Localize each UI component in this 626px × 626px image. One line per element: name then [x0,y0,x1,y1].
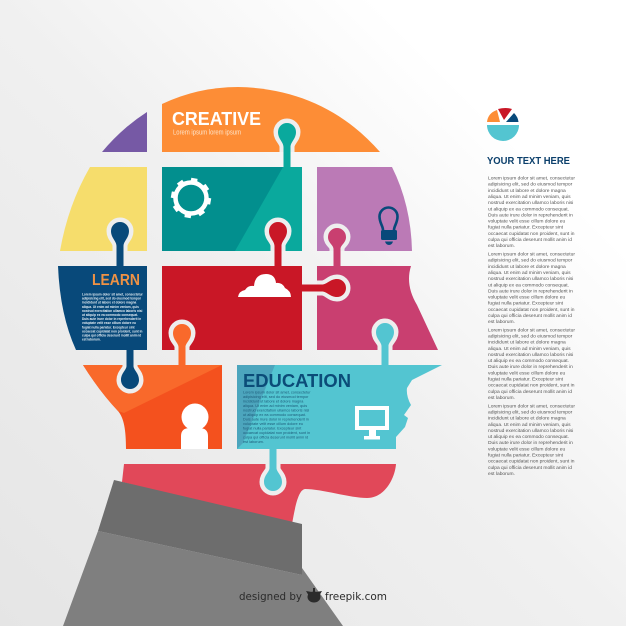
suit body [63,464,396,626]
paragraph 1: nostrud exercitation ullamco laboris nisi [488,200,573,206]
piece: purple corner [102,112,147,152]
paragraph 3: occaecat cupidatat non proident, sunt in [488,383,575,389]
paragraph 2: nostrud exercitation ullamco laboris nisi [488,276,573,282]
paragraph 1: aliqua. Ut enim ad minim veniam, quis [488,194,571,200]
text block: learn: nostrud exercitation ullamco laboris nisi [82,309,143,313]
icon: cloud [238,274,291,297]
paragraph 1: adipisicing elit, sed do eiusmod tempor [488,182,573,188]
paragraph 2: est laborum. [488,319,515,325]
connector: red pin right [302,278,346,298]
piece: creative orange [162,87,380,152]
piece: plum bulb [317,167,412,251]
paragraph 2: aliqua. Ut enim ad minim veniam, quis [488,270,571,276]
heading: learn: LEARN [92,272,140,289]
text block: learn: aliqua. Ut enim ad minim veniam, quis [82,305,139,309]
paragraph 4: fugiat nulla pariatur. Excepteur sint [488,452,564,458]
connector: navy pin top [110,222,130,266]
text block: education: est laborum. [243,440,264,444]
icon: gear [171,178,211,218]
neck and chin piece [122,464,396,524]
icon: person [181,404,208,449]
text block: learn: Lorem ipsum dolor sit amet, consectetur [82,292,144,296]
paragraph 1: ut aliquip ex ea commodo consequat. [488,206,569,212]
piece: education cyan [237,365,442,449]
suit jacket [63,531,343,626]
connector: navy pin bottom [120,350,140,390]
text block: education: adipisicing elit, sed do eiusmod tempor [243,395,309,399]
suit collar [98,480,302,575]
icon: monitor [355,406,389,440]
credit: designed by freepik [239,588,387,603]
heading: your text here: YOUR TEXT HERE [487,155,570,167]
paragraph 1: culpa qui officia deserunt mollit anim id [488,237,572,243]
text block: education: Lorem ipsum dolor sit amet, consectetur [243,390,311,394]
paragraph 1: est laborum. [488,243,515,249]
text block: learn: Duis aute irure dolor in reprehenderit in [82,317,141,321]
paragraph 1: incididunt ut labore et dolore magna [488,188,566,194]
connector: cyan pin top [376,322,394,365]
text block: learn: ut aliquip ex ea commodo consequat. [82,313,138,317]
paragraph 2: occaecat cupidatat non proident, sunt in [488,307,575,313]
piece: teal gear [162,167,302,251]
text block: education: ut aliquip ex ea commodo consequat. [243,413,306,417]
paragraph 2: Duis aute irure dolor in reprehenderit in [488,288,573,294]
icon: light bulb [380,208,398,245]
connector: teal pin [278,122,296,167]
paragraph 1: occaecat cupidatat non proident, sunt in [488,231,575,237]
paragraph 2: ut aliquip ex ea commodo consequat. [488,282,569,288]
heading: education: EDUCATION [243,370,351,391]
paragraph 3: incididunt ut labore et dolore magna [488,340,566,346]
heading: creative: CREATIVE [172,109,261,129]
text block: education: incididunt ut labore et dolore magna [243,400,304,404]
piece: yellow [60,167,147,251]
connector: orange pin [172,324,192,365]
text block: learn: voluptate velit esse cillum dolore eu [82,321,136,325]
paragraph 3: adipisicing elit, sed do eiusmod tempor [488,333,573,339]
text block: education: aliqua. Ut enim ad minim veniam, quis [243,404,307,408]
paragraph 4: nostrud exercitation ullamco laboris nisi [488,428,573,434]
text block: learn: culpa qui officia deserunt mollit anim id [82,334,141,338]
icon: pie chart [487,108,519,141]
text block: education: voluptate velit esse cillum dolore eu [243,422,303,426]
text block: learn: incididunt ut labore et dolore magna [82,301,137,305]
paragraph 4: Lorem ipsum dolor sit amet, consectetur [488,403,575,409]
paragraph 3: voluptate velit esse cillum dolore eu [488,370,565,376]
paragraph 4: aliqua. Ut enim ad minim veniam, quis [488,422,571,428]
paragraph 3: aliqua. Ut enim ad minim veniam, quis [488,346,571,352]
text block: learn: occaecat cupidatat non proident, sunt in [82,329,142,333]
piece: learn navy [58,266,147,350]
paragraph 4: adipisicing elit, sed do eiusmod tempor [488,409,573,415]
piece: pink [317,266,438,350]
text block: learn: fugiat nulla pariatur. Excepteur sint [82,325,135,329]
paragraph 4: est laborum. [488,471,515,477]
subheading: creative: Lorem ipsum lorem ipsum [173,130,241,136]
paragraph 3: fugiat nulla pariatur. Excepteur sint [488,376,564,382]
paragraph 2: incididunt ut labore et dolore magna [488,264,566,270]
paragraph 1: Duis aute irure dolor in reprehenderit in [488,212,573,218]
paragraph 1: Lorem ipsum dolor sit amet, consectetur [488,176,575,182]
paragraph 1: voluptate velit esse cillum dolore eu [488,219,565,225]
paragraph 3: est laborum. [488,395,515,401]
paragraph 4: ut aliquip ex ea commodo consequat. [488,434,569,440]
connector: pink pin top [328,228,346,266]
paragraph 2: Lorem ipsum dolor sit amet, consectetur [488,252,575,258]
paragraph 4: incididunt ut labore et dolore magna [488,416,566,422]
paragraph 4: culpa qui officia deserunt mollit anim id [488,465,572,471]
piece: red cloud [162,266,302,350]
paragraph 2: fugiat nulla pariatur. Excepteur sint [488,301,564,307]
paragraph 2: voluptate velit esse cillum dolore eu [488,295,565,301]
text block: learn: adipisicing elit, sed do eiusmod tempor [82,297,142,301]
text block: education: culpa qui officia deserunt mollit anim id [243,436,308,440]
paragraph 2: culpa qui officia deserunt mollit anim id [488,313,572,319]
text block: education: fugiat nulla pariatur. Excepteur sint [243,426,302,430]
paragraph 3: ut aliquip ex ea commodo consequat. [488,358,569,364]
paragraph 3: nostrud exercitation ullamco laboris nisi [488,352,573,358]
paragraph 2: adipisicing elit, sed do eiusmod tempor [488,258,573,264]
paragraph 3: culpa qui officia deserunt mollit anim id [488,389,572,395]
text column [488,176,576,477]
paragraph 3: Duis aute irure dolor in reprehenderit in [488,364,573,370]
paragraph 1: fugiat nulla pariatur. Excepteur sint [488,225,564,231]
text block: education: nostrud exercitation ullamco laboris nisi [243,408,309,412]
connector: red pin top [268,222,288,266]
paragraph 4: occaecat cupidatat non proident, sunt in [488,459,575,465]
piece: orange person [83,365,222,449]
icon: freepik logo [306,588,322,602]
text block: education: occaecat cupidatat non proident, sunt in [243,431,310,435]
credit: designed by freepik: freepik.com [325,591,387,603]
text block: learn: est laborum. [82,338,101,342]
paragraph 4: voluptate velit esse cillum dolore eu [488,446,565,452]
puzzle head [58,87,442,492]
paragraph 4: Duis aute irure dolor in reprehenderit in [488,440,573,446]
text block: education: Duis aute irure dolor in reprehenderit in [243,418,309,422]
paragraph 3: Lorem ipsum dolor sit amet, consectetur [488,327,575,333]
credit: designed by freepik: designed by [239,591,302,603]
connector: cyan pin bottom [264,449,282,492]
